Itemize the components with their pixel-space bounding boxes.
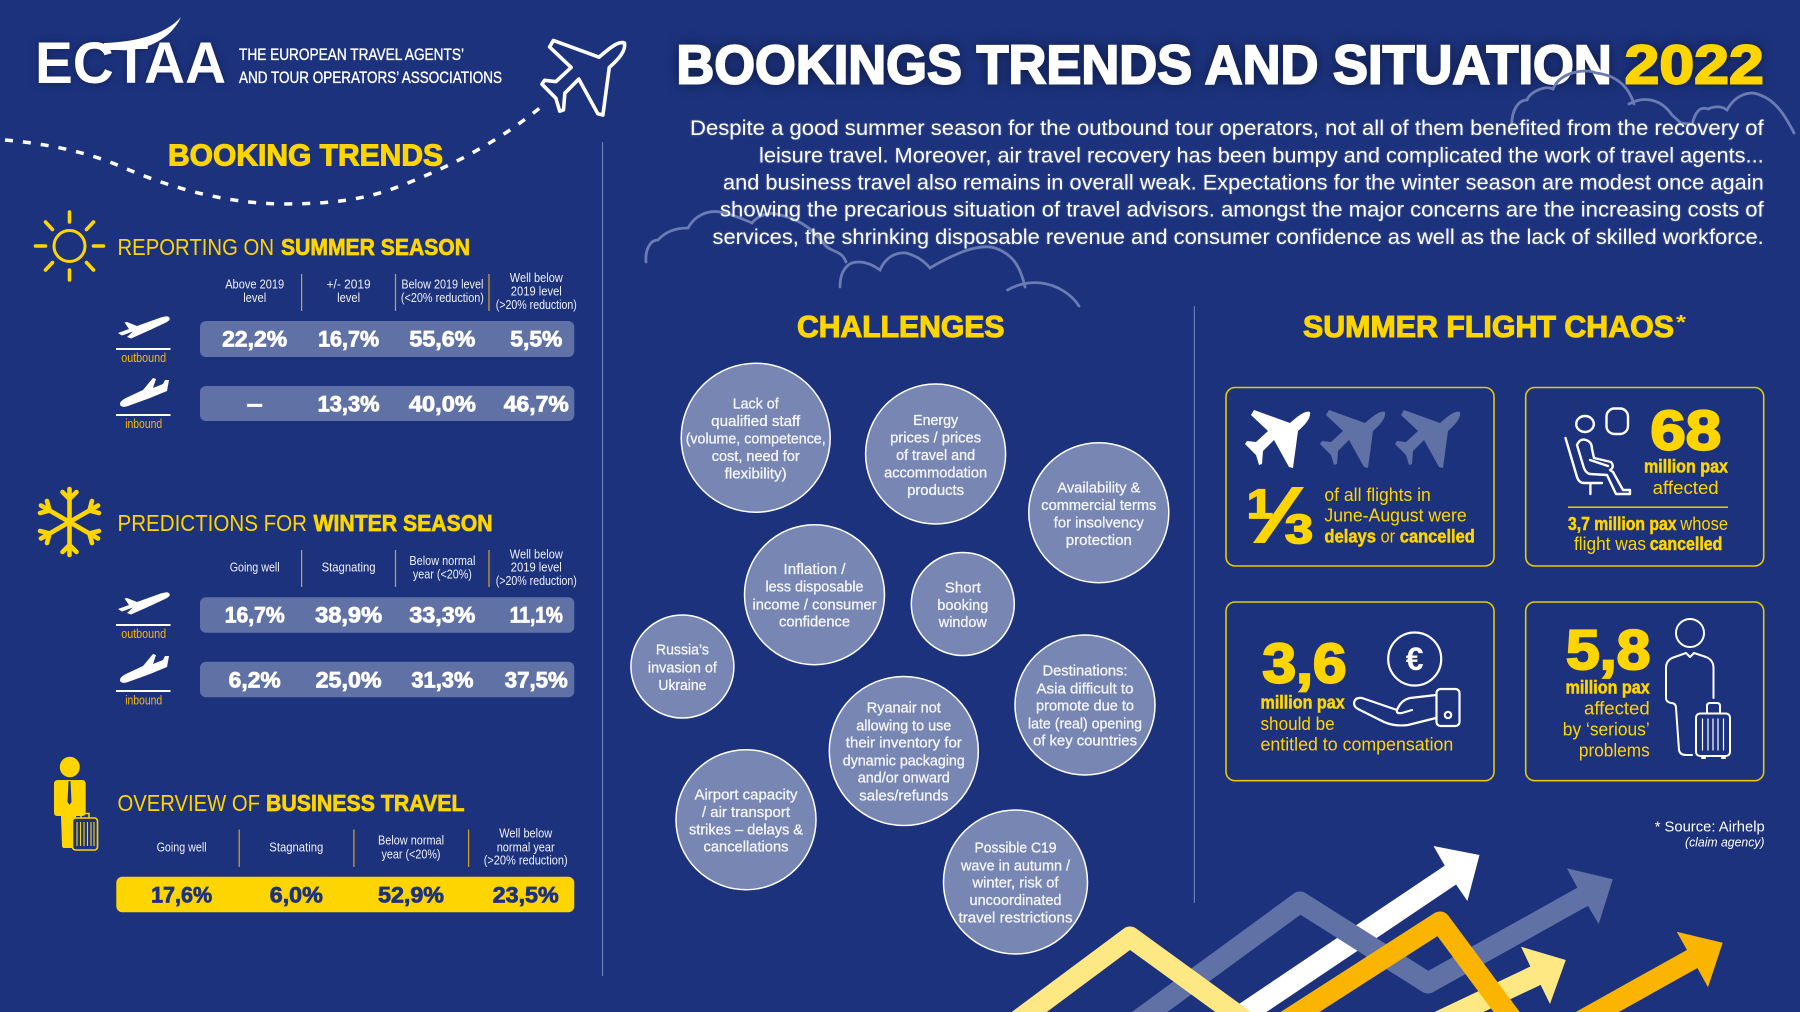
- bar: inbound values: –: [247, 392, 263, 417]
- bubble: airport capacity: [676, 750, 816, 890]
- bubble: lack of qualified staff: (volume, competence,: [686, 431, 826, 448]
- bubble: energy prices: of travel and: [896, 447, 975, 464]
- bubble: inflation: Inflation /: [784, 561, 846, 578]
- icon: outbound: [116, 592, 170, 641]
- bar: outbound values: [200, 597, 574, 633]
- section title: OVERVIEW OF: [118, 790, 260, 816]
- column headers: 2019 level: [511, 561, 562, 575]
- big number: 3,6: [1262, 632, 1347, 695]
- column headers: +/- 2019: [327, 278, 371, 292]
- section title: WINTER SEASON: [314, 510, 492, 536]
- bar: inbound values: 46,7%: [504, 392, 569, 417]
- bubble: C19: wave in autumn /: [960, 857, 1071, 874]
- icon: outbound: outbound: [121, 627, 166, 641]
- column headers: [225, 271, 577, 312]
- column headers: Going well: [230, 561, 280, 575]
- column headers: Well below: [510, 547, 564, 561]
- intro paragraph: [690, 117, 1764, 249]
- column headers: (<20% reduction): [401, 291, 484, 305]
- intro paragraph: Despite a good summer season for the outbound tour operators, not all of them benefited from the recovery of: [690, 117, 1764, 140]
- bar: inbound values: 37,5%: [505, 668, 568, 693]
- bubble: availability: Availability &: [1057, 479, 1140, 496]
- bubble: Russia: Russia’s: [656, 642, 709, 659]
- section title: [118, 510, 492, 536]
- bubble: Russia: Ukraine: [658, 677, 706, 694]
- bubble: lack of qualified staff: Lack of: [733, 395, 779, 412]
- bubble: energy prices: [866, 384, 1006, 524]
- source note: [1655, 819, 1765, 850]
- bubble: destinations: [1015, 635, 1155, 775]
- bar: inbound values: 6,2%: [229, 668, 281, 693]
- bar: outbound values: [200, 321, 574, 357]
- panel: 3,6 million compensation: [1226, 602, 1494, 781]
- logo tagline: AND TOUR OPERATORS’ ASSOCIATIONS: [239, 69, 502, 87]
- column headers: (>20% reduction): [496, 298, 577, 312]
- bubble: airport capacity: strikes – delays &: [689, 821, 803, 838]
- bar: outbound values: 33,3%: [409, 603, 475, 628]
- one third figure: 1: [1247, 481, 1273, 527]
- bubble: lack of qualified staff: [681, 363, 830, 512]
- bar: inbound values: 13,3%: [318, 392, 380, 417]
- bar: inbound values: [200, 662, 574, 697]
- bubble: short booking window: window: [938, 614, 987, 631]
- bar: outbound values: 38,9%: [315, 603, 382, 628]
- bubble: Ryanair: Ryanair not: [867, 700, 942, 717]
- bar: outbound values: 11,1%: [510, 603, 563, 628]
- panel: summer season: [36, 212, 577, 431]
- section title: [118, 234, 470, 260]
- text: million pax: [1566, 676, 1650, 697]
- bubble: availability: [1029, 443, 1169, 583]
- bar: business values: 6,0%: [270, 883, 323, 908]
- section title: BUSINESS TRAVEL: [266, 790, 464, 816]
- column headers: Going well: [157, 840, 207, 854]
- arrow: white: [1220, 846, 1480, 1012]
- bubble: Ryanair: and/or onward: [858, 770, 950, 787]
- big number: 68: [1650, 398, 1721, 461]
- icon: snowflake: [37, 489, 102, 555]
- column headers: year (<20%): [382, 847, 440, 861]
- bubble: destinations: Asia difficult to: [1036, 680, 1134, 697]
- column headers: level: [243, 291, 266, 305]
- text: [1324, 484, 1475, 547]
- bubble: short booking window: [911, 552, 1014, 656]
- column headers: Well below: [499, 827, 553, 841]
- column headers: (>20% reduction): [484, 854, 568, 868]
- bar: outbound values: 55,6%: [409, 327, 475, 352]
- bubble: C19: winter, risk of: [972, 875, 1059, 892]
- bar: inbound values: 25,0%: [316, 668, 382, 693]
- text: delays: [1324, 526, 1376, 547]
- column headers: year (<20%): [413, 567, 472, 581]
- column headers: (>20% reduction): [496, 574, 577, 588]
- dashed flight path: [5, 107, 541, 204]
- bar: business values: [116, 877, 574, 912]
- text: [1568, 456, 1729, 554]
- bar: inbound values: 40,0%: [409, 392, 476, 417]
- icon: inbound: [116, 654, 170, 707]
- icon: three planes: [1245, 410, 1460, 468]
- divider: [602, 142, 604, 976]
- bubble: inflation: confidence: [779, 614, 850, 631]
- bubble: Ryanair: sales/refunds: [859, 787, 948, 804]
- text: [1260, 691, 1453, 755]
- column headers: [157, 827, 568, 868]
- logo tagline: [239, 46, 502, 87]
- column headers: level: [337, 291, 360, 305]
- bar: business values: 52,9%: [378, 883, 444, 908]
- bubble: Ryanair: their inventory for: [846, 735, 962, 752]
- icon: business person with suitcase: [54, 757, 98, 850]
- bubble: Russia: [631, 615, 734, 718]
- intro paragraph: leisure travel. Moreover, air travel recovery has been bumpy and complicated the work of travel agents...: [759, 144, 1764, 167]
- bubble: destinations: Destinations:: [1042, 663, 1128, 680]
- text: by ‘serious’: [1563, 719, 1650, 740]
- main title: 2022: [1624, 33, 1764, 95]
- intro paragraph: services, the shrinking disposable revenue and consumer confidence as well as the lack of skilled workforce.: [712, 226, 1764, 249]
- heading: summer flight chaos: SUMMER FLIGHT CHAOS: [1303, 309, 1674, 344]
- text: or: [1381, 526, 1395, 547]
- icon: inbound: [116, 378, 170, 431]
- bubble: lack of qualified staff: cost, need for: [712, 448, 800, 465]
- bubble: inflation: [744, 525, 884, 665]
- panel: business travel: [54, 757, 574, 912]
- text: problems: [1579, 740, 1650, 761]
- panel: 68 million: [1526, 388, 1764, 566]
- text: of all flights in: [1324, 484, 1431, 505]
- heading: booking trends: BOOKING TRENDS: [168, 138, 443, 172]
- bubble: energy prices: Energy: [913, 412, 959, 429]
- bubble: lack of qualified staff: flexibility): [725, 466, 787, 483]
- text: million pax: [1644, 456, 1729, 477]
- bubble: Ryanair: dynamic packaging: [843, 752, 965, 769]
- bubble: destinations: of key countries: [1033, 733, 1137, 750]
- icon: passenger in seat: [1566, 408, 1630, 494]
- text: whose: [1679, 513, 1728, 534]
- bubble: short booking window: Short: [945, 580, 982, 597]
- source note: * Source: Airhelp: [1655, 819, 1765, 836]
- text: 3,7 million pax: [1568, 513, 1677, 534]
- heading: challenges: CHALLENGES: [797, 309, 1004, 344]
- icon: traveller with suitcase: [1666, 619, 1730, 758]
- column headers: Below normal: [409, 554, 475, 568]
- panel: one third of flights: [1226, 388, 1494, 566]
- icon: outbound: outbound: [121, 351, 166, 365]
- bubble: availability: for insolvency: [1054, 514, 1144, 531]
- bar: outbound values: 5,5%: [510, 327, 562, 352]
- bubble: energy prices: accommodation: [884, 465, 987, 482]
- bar: business values: 17,6%: [151, 883, 212, 908]
- text: million pax: [1260, 691, 1345, 712]
- intro paragraph: showing the precarious situation of travel advisors. amongst the major concerns are the increasing costs of: [720, 199, 1764, 222]
- panel: 5,8 million: [1526, 602, 1764, 781]
- bubble: airport capacity: Airport capacity: [694, 786, 798, 803]
- icon: euro in hand: €: [1406, 641, 1424, 677]
- text: flight was: [1574, 533, 1646, 554]
- text: cancelled: [1400, 526, 1475, 547]
- bubble: inflation: income / consumer: [752, 596, 877, 613]
- panel: challenges bubbles: [631, 363, 1169, 954]
- bubble: C19: uncoordinated: [970, 892, 1062, 909]
- bubble: C19: travel restrictions: [958, 910, 1072, 927]
- bar: outbound values: 22,2%: [222, 327, 287, 352]
- source note: (claim agency): [1685, 836, 1764, 850]
- panel: winter season: [37, 489, 577, 707]
- bubble: airport capacity: cancellations: [704, 839, 788, 856]
- bubble: Ryanair: allowing to use: [856, 717, 951, 734]
- column headers: [230, 547, 577, 588]
- bubble: availability: commercial terms: [1041, 497, 1156, 514]
- column headers: Above 2019: [225, 278, 284, 292]
- icon: outline plane: [542, 40, 625, 115]
- logo: ECTAA: ECTAA: [35, 31, 226, 96]
- bubble: availability: protection: [1066, 532, 1132, 549]
- main title: BOOKINGS TRENDS AND SITUATION: [676, 33, 1612, 95]
- bubble: energy prices: products: [907, 482, 964, 499]
- bubble: C19: [944, 810, 1088, 954]
- text: [1563, 676, 1650, 761]
- text: June-August were: [1324, 505, 1467, 526]
- section title: PREDICTIONS FOR: [118, 510, 307, 536]
- bar: inbound values: 31,3%: [411, 668, 473, 693]
- bubble: C19: Possible C19: [974, 840, 1056, 857]
- bar: outbound values: 16,7%: [318, 327, 379, 352]
- bubble: inflation: less disposable: [766, 579, 864, 596]
- icon: outbound: [116, 316, 170, 365]
- icon: sun: [36, 212, 104, 280]
- bubble: short booking window: booking: [937, 597, 988, 614]
- text: affected: [1653, 477, 1719, 498]
- column headers: Well below: [510, 271, 564, 285]
- one third figure: 3: [1285, 506, 1313, 552]
- divider: [1193, 306, 1195, 903]
- arrow: periwinkle: [1125, 868, 1613, 1012]
- bar: outbound values: 16,7%: [225, 603, 285, 628]
- bubble: Russia: invasion of: [648, 659, 718, 676]
- bubble: Ryanair: [829, 676, 978, 826]
- clouds: [646, 71, 1794, 306]
- bar: business values: 23,5%: [493, 883, 559, 908]
- bubble: airport capacity: / air transport: [702, 804, 791, 821]
- bubble: destinations: promote due to: [1036, 698, 1134, 715]
- icon: euro in hand: [1354, 632, 1460, 726]
- section title: SUMMER SEASON: [281, 234, 470, 260]
- column headers: Stagnating: [322, 561, 376, 575]
- arrow: orange: [1272, 922, 1723, 1012]
- one third figure: [1247, 481, 1313, 552]
- column headers: Below normal: [378, 834, 444, 848]
- bubble: lack of qualified staff: qualified staff: [711, 413, 801, 430]
- column headers: Stagnating: [269, 840, 323, 854]
- logo tagline: THE EUROPEAN TRAVEL AGENTS’: [239, 46, 464, 64]
- decorative growth arrows: [1005, 846, 1723, 1012]
- bar: inbound values: [200, 386, 574, 421]
- column headers: 2019 level: [511, 284, 562, 298]
- intro paragraph: and business travel also remains in overall weak. Expectations for the winter season are modest once again: [723, 171, 1764, 194]
- icon: inbound: inbound: [125, 417, 162, 431]
- section title: [118, 790, 464, 816]
- text: should be: [1260, 713, 1335, 734]
- heading: summer flight chaos: *: [1676, 312, 1686, 334]
- big number: 5,8: [1566, 618, 1650, 681]
- text: entitled to compensation: [1260, 734, 1453, 755]
- column headers: normal year: [497, 840, 555, 854]
- icon: inbound: inbound: [125, 693, 162, 707]
- arrow: light yellow: [1005, 937, 1566, 1012]
- bubble: energy prices: prices / prices: [890, 430, 981, 447]
- bubble: destinations: late (real) opening: [1028, 715, 1142, 732]
- text: cancelled: [1650, 533, 1722, 554]
- column headers: Below 2019 level: [401, 278, 483, 292]
- section title: REPORTING ON: [118, 234, 274, 260]
- text: affected: [1584, 697, 1650, 718]
